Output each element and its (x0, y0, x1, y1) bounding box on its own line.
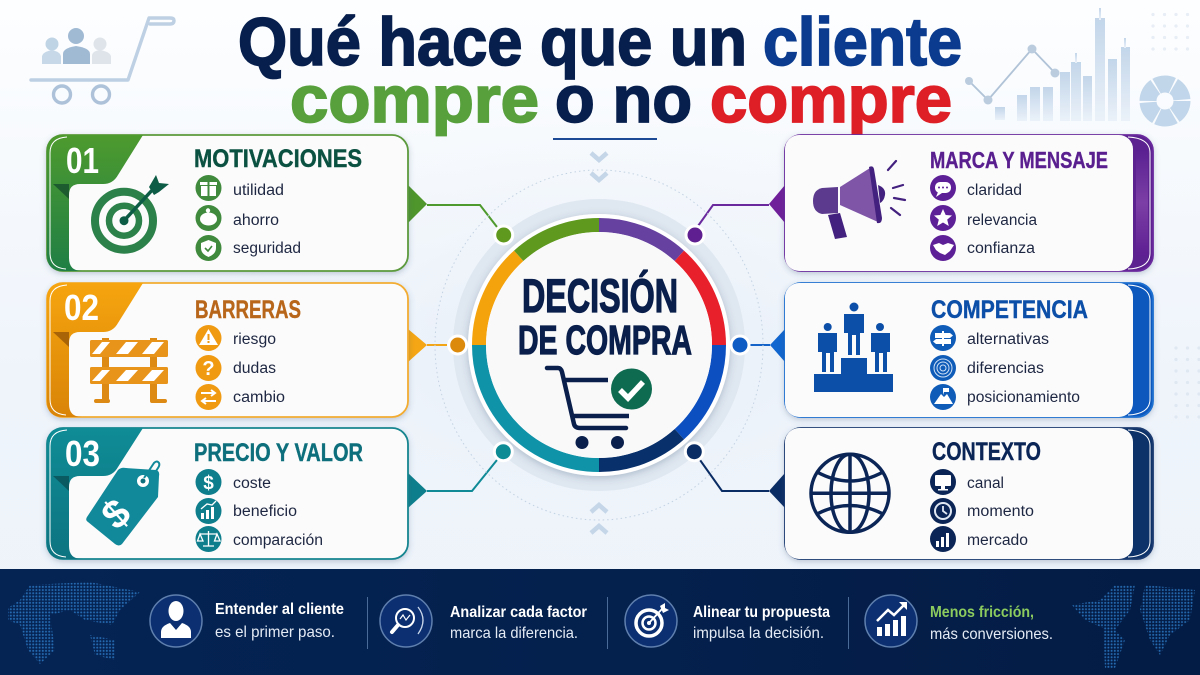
items (930, 325, 1080, 410)
center text (518, 269, 692, 363)
icon: price tag: $ (93, 491, 139, 538)
message 4: Menos fricción, (930, 604, 1034, 621)
panel: 01 motivaciones (47, 135, 427, 271)
panel: 02 barreras (47, 283, 427, 417)
bottom band (0, 569, 1200, 675)
items (196, 469, 323, 552)
title: Qué hace que un (238, 4, 747, 80)
number: 01 (66, 140, 99, 181)
items: confianza (967, 240, 1035, 257)
center chevrons (591, 153, 607, 533)
items: seguridad (233, 240, 301, 257)
icon: price tag (86, 462, 159, 546)
world map right (1072, 585, 1195, 668)
items: momento (967, 503, 1034, 520)
ring segments (479, 225, 719, 465)
message 3 (625, 595, 830, 647)
message 2: Analizar cada factor (450, 604, 587, 621)
center decision circle (435, 170, 763, 520)
icon: barricade (90, 338, 168, 401)
items (930, 175, 1037, 261)
items (930, 469, 1034, 552)
icon: target (95, 175, 169, 250)
items: utilidad (233, 182, 284, 199)
title: cliente (763, 4, 962, 80)
items: dudas (233, 360, 276, 377)
panel: marca y mensaje (769, 135, 1153, 271)
message 2 (380, 595, 587, 647)
items: diferencias (967, 360, 1044, 377)
heading: COMPETENCIA (931, 296, 1088, 324)
message 4 (865, 595, 1053, 647)
items: canal (967, 475, 1004, 492)
divider (367, 597, 368, 649)
items: ahorro (233, 212, 279, 229)
icon: podium with people (814, 302, 893, 392)
panel: contexto (769, 428, 1153, 559)
decorative chart: bars, line and donut (965, 7, 1190, 121)
items: claridad (967, 182, 1022, 199)
panel: 03 precio y valor (47, 428, 427, 559)
connector lines (427, 205, 770, 491)
items: posicionamiento (967, 389, 1080, 406)
title: o no (555, 62, 692, 136)
message 3: impulsa la decisión. (693, 625, 824, 642)
title: compre (290, 62, 539, 136)
items: ? (202, 358, 215, 380)
center text: DE COMPRA (518, 317, 692, 363)
world map left (8, 582, 140, 664)
number: 03 (65, 433, 100, 474)
items: relevancia (967, 212, 1037, 229)
items: alternativas (967, 331, 1049, 348)
items (196, 325, 285, 410)
heading: BARRERAS (195, 296, 301, 324)
message 1: es el primer paso. (215, 624, 335, 641)
title (238, 4, 962, 140)
message 2: marca la diferencia. (450, 625, 578, 642)
divider (848, 597, 849, 649)
icon: megaphone (813, 161, 905, 239)
items: cambio (233, 389, 285, 406)
items: mercado (967, 532, 1028, 549)
number: 02 (64, 287, 99, 328)
heading: PRECIO Y VALOR (194, 439, 363, 467)
items: $ (203, 473, 214, 494)
items: beneficio (233, 503, 297, 520)
center text: DECISIÓN (522, 269, 678, 322)
decorative dots right (1168, 345, 1200, 427)
icon: globe (811, 454, 889, 532)
message 1 (150, 595, 344, 647)
ring nodes (449, 226, 749, 461)
items: riesgo (233, 331, 276, 348)
message 1: Entender al cliente (215, 601, 344, 618)
heading: MARCA Y MENSAJE (930, 147, 1108, 173)
divider (607, 597, 608, 649)
items: coste (233, 475, 271, 492)
title: compre (710, 62, 952, 136)
items (196, 175, 301, 261)
message 3: Alinear tu propuesta (693, 604, 830, 621)
heading: MOTIVACIONES (194, 145, 362, 173)
message 4: más conversiones. (930, 626, 1053, 643)
panel: competencia (770, 283, 1153, 417)
icon: shopping cart with check (547, 368, 652, 449)
heading: CONTEXTO (932, 438, 1041, 466)
decorative icon: shopping cart with people (31, 18, 174, 103)
items: comparación (233, 532, 323, 549)
